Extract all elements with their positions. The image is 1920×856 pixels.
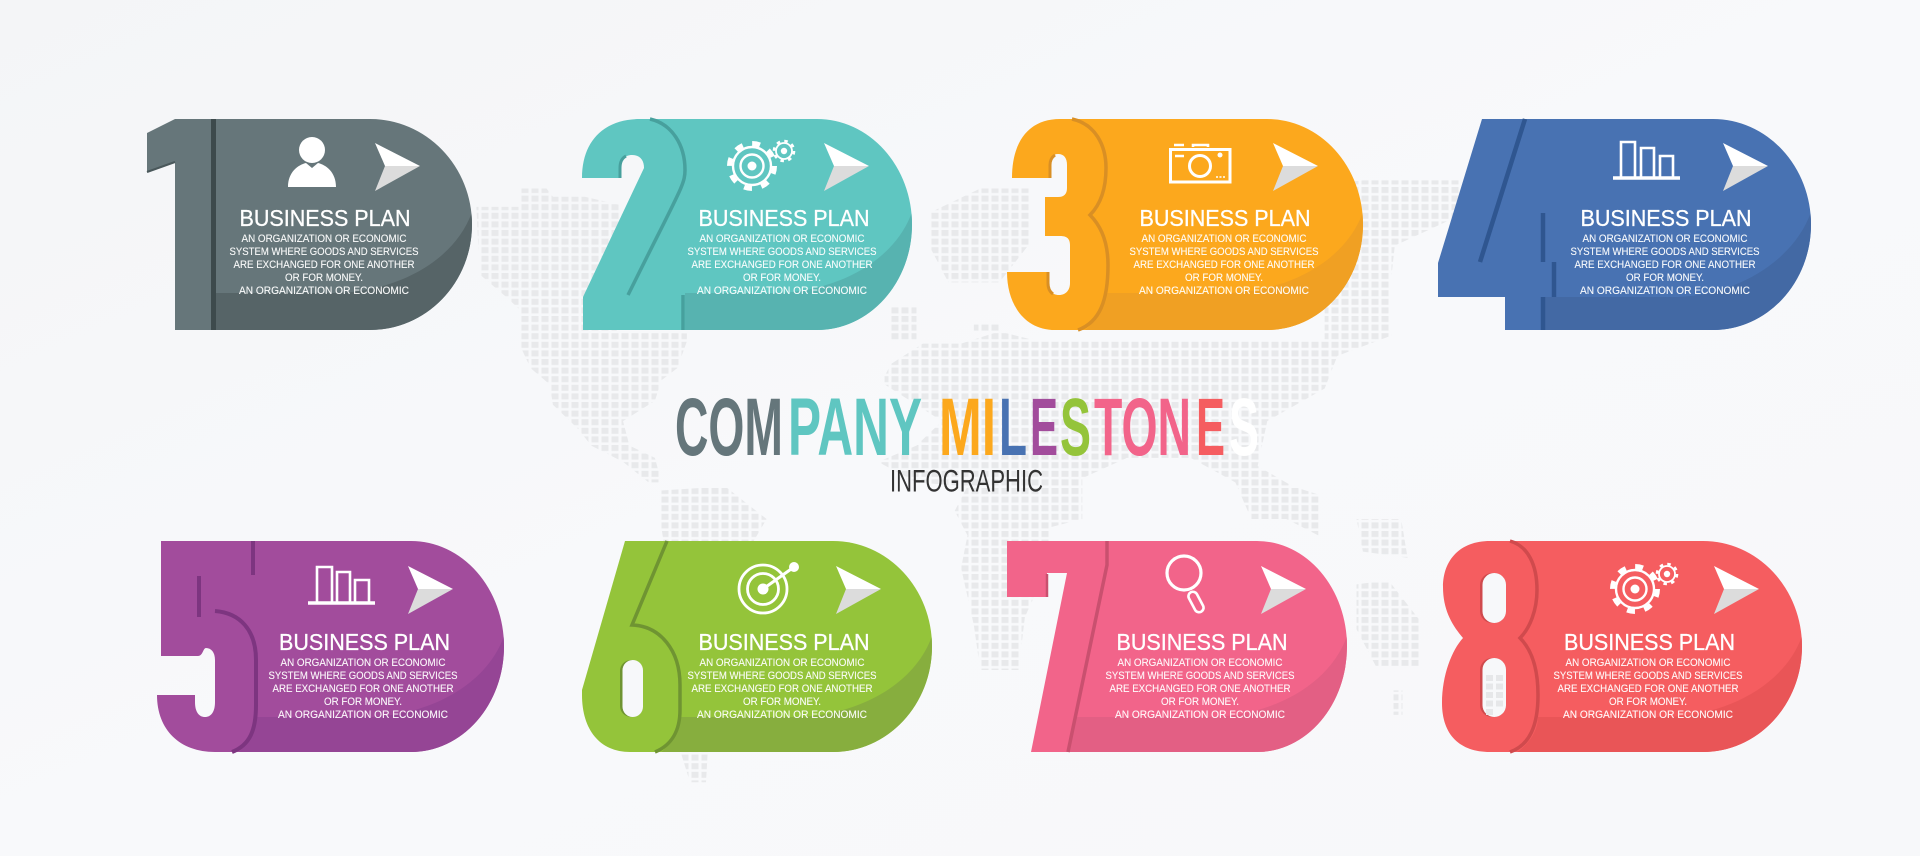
number 4 card shape bbox=[1438, 119, 1811, 330]
text block: ARE EXCHANGED FOR ONE ANOTHER bbox=[1574, 259, 1756, 271]
text block: ARE EXCHANGED FOR ONE ANOTHER bbox=[692, 683, 873, 695]
icon: person bbox=[288, 137, 336, 187]
number 3 card shape bbox=[1007, 119, 1363, 330]
heading: BUSINESS PLAN bbox=[279, 629, 450, 655]
number 8 card shape bbox=[1442, 541, 1802, 752]
text block: AN ORGANIZATION OR ECONOMIC bbox=[1580, 285, 1750, 297]
number 1 card shape bbox=[147, 119, 472, 330]
text block: AN ORGANIZATION OR ECONOMIC bbox=[242, 233, 407, 245]
text block: AN ORGANIZATION OR ECONOMIC bbox=[278, 709, 448, 721]
icon: arrow bbox=[408, 566, 453, 614]
text block: SYSTEM WHERE GOODS AND SERVICES bbox=[268, 670, 458, 682]
title: E bbox=[1196, 382, 1225, 473]
icon: gears bbox=[730, 141, 794, 188]
icon: camera bbox=[1170, 145, 1230, 182]
icon: bar chart bbox=[1613, 142, 1680, 178]
text block: ARE EXCHANGED FOR ONE ANOTHER bbox=[234, 259, 415, 271]
text block: OR FOR MONEY. bbox=[1185, 272, 1263, 284]
text block: AN ORGANIZATION OR ECONOMIC bbox=[239, 285, 409, 297]
text block bbox=[688, 657, 876, 721]
title: COM bbox=[675, 382, 783, 473]
text block: AN ORGANIZATION OR ECONOMIC bbox=[1566, 657, 1731, 669]
title: E bbox=[1030, 382, 1058, 473]
panel: milestone 5 bbox=[157, 541, 512, 757]
panel: milestone 6 bbox=[582, 541, 940, 757]
text block: AN ORGANIZATION OR ECONOMIC bbox=[1582, 233, 1748, 245]
heading: BUSINESS PLAN bbox=[698, 205, 870, 231]
text block: ARE EXCHANGED FOR ONE ANOTHER bbox=[272, 683, 454, 695]
text block: OR FOR MONEY. bbox=[743, 696, 821, 708]
icon: arrow bbox=[824, 143, 869, 191]
text block: OR FOR MONEY. bbox=[1161, 696, 1239, 708]
title: PANY bbox=[788, 382, 922, 473]
text block: AN ORGANIZATION OR ECONOMIC bbox=[280, 657, 446, 669]
title: L bbox=[999, 382, 1027, 473]
text block bbox=[688, 233, 876, 297]
heading: BUSINESS PLAN bbox=[1140, 205, 1310, 231]
text block: AN ORGANIZATION OR ECONOMIC bbox=[1142, 233, 1307, 245]
dotted world map bbox=[470, 160, 1470, 800]
text block: OR FOR MONEY. bbox=[324, 696, 402, 708]
text block: SYSTEM WHERE GOODS AND SERVICES bbox=[1554, 670, 1742, 682]
text block: SYSTEM WHERE GOODS AND SERVICES bbox=[1106, 670, 1294, 682]
text block: ARE EXCHANGED FOR ONE ANOTHER bbox=[692, 259, 873, 271]
panel: milestone 8 bbox=[1442, 541, 1810, 757]
text block: ARE EXCHANGED FOR ONE ANOTHER bbox=[1134, 259, 1315, 271]
title: S bbox=[1060, 382, 1091, 473]
icon: arrow bbox=[1714, 566, 1759, 614]
heading: BUSINESS PLAN bbox=[1564, 629, 1735, 655]
text block bbox=[1130, 233, 1318, 297]
text block: AN ORGANIZATION OR ECONOMIC bbox=[697, 285, 867, 297]
text block: AN ORGANIZATION OR ECONOMIC bbox=[697, 709, 867, 721]
heading: BUSINESS PLAN bbox=[1116, 629, 1288, 655]
text block: OR FOR MONEY. bbox=[285, 272, 363, 284]
icon: target bbox=[739, 562, 799, 613]
text block: ARE EXCHANGED FOR ONE ANOTHER bbox=[1558, 683, 1739, 695]
text block: ARE EXCHANGED FOR ONE ANOTHER bbox=[1110, 683, 1291, 695]
panel: milestone 1 bbox=[147, 119, 480, 335]
text block bbox=[268, 657, 458, 721]
text block bbox=[1554, 657, 1742, 721]
title bbox=[675, 382, 1259, 473]
panel: milestone 7 bbox=[1007, 541, 1355, 757]
text block: AN ORGANIZATION OR ECONOMIC bbox=[1115, 709, 1285, 721]
text block bbox=[230, 233, 418, 297]
subtitle: INFOGRAPHIC bbox=[890, 462, 1043, 498]
text block: SYSTEM WHERE GOODS AND SERVICES bbox=[688, 246, 876, 258]
text block: SYSTEM WHERE GOODS AND SERVICES bbox=[1130, 246, 1318, 258]
text block: AN ORGANIZATION OR ECONOMIC bbox=[1118, 657, 1283, 669]
title: TON bbox=[1094, 382, 1191, 473]
number 6 card shape bbox=[582, 541, 932, 752]
panel: milestone 4 bbox=[1438, 119, 1818, 335]
text block: SYSTEM WHERE GOODS AND SERVICES bbox=[688, 670, 876, 682]
icon: arrow bbox=[1723, 143, 1768, 191]
title: S bbox=[1229, 382, 1259, 473]
title: MI bbox=[939, 382, 996, 473]
icon: gears bbox=[1612, 564, 1677, 612]
icon: bar chart bbox=[308, 567, 375, 603]
heading: BUSINESS PLAN bbox=[1580, 205, 1752, 231]
icon: arrow bbox=[836, 566, 881, 614]
panel: milestone 2 bbox=[582, 119, 920, 335]
icon: magnifier bbox=[1167, 556, 1205, 614]
text block: AN ORGANIZATION OR ECONOMIC bbox=[1563, 709, 1733, 721]
text block: OR FOR MONEY. bbox=[743, 272, 821, 284]
text block bbox=[1106, 657, 1294, 721]
icon: arrow bbox=[1273, 143, 1318, 191]
heading: BUSINESS PLAN bbox=[240, 205, 410, 231]
text block bbox=[1570, 233, 1760, 297]
heading: BUSINESS PLAN bbox=[698, 629, 870, 655]
number 5 card shape bbox=[157, 541, 504, 752]
text block: AN ORGANIZATION OR ECONOMIC bbox=[700, 657, 865, 669]
icon: arrow bbox=[375, 143, 420, 191]
text block: AN ORGANIZATION OR ECONOMIC bbox=[1139, 285, 1309, 297]
panel: milestone 3 bbox=[1007, 119, 1370, 335]
text block: OR FOR MONEY. bbox=[1626, 272, 1704, 284]
icon: arrow bbox=[1261, 566, 1306, 614]
number 7 card shape bbox=[1007, 541, 1347, 752]
text block: AN ORGANIZATION OR ECONOMIC bbox=[700, 233, 865, 245]
text block: OR FOR MONEY. bbox=[1609, 696, 1687, 708]
text block: SYSTEM WHERE GOODS AND SERVICES bbox=[230, 246, 418, 258]
text block: SYSTEM WHERE GOODS AND SERVICES bbox=[1570, 246, 1760, 258]
number 2 card shape bbox=[582, 119, 912, 330]
